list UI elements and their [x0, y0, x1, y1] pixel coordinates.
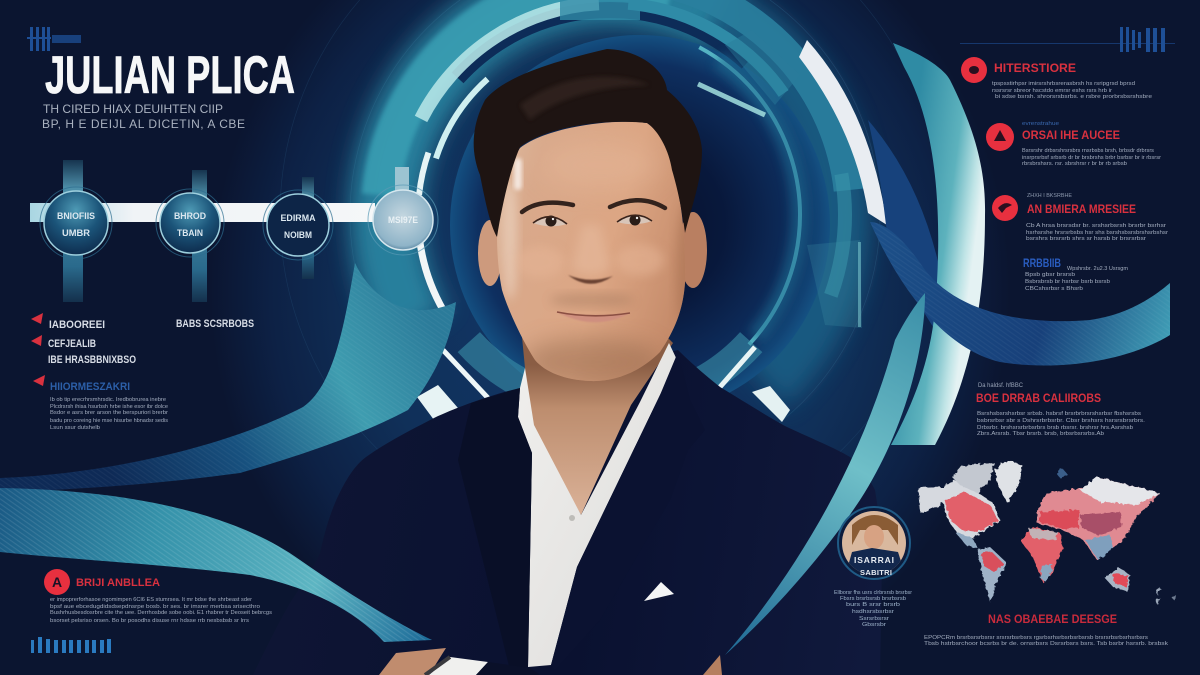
portrait: man in navy suit [326, 49, 882, 675]
equalizer bars [31, 637, 111, 653]
islands [1056, 469, 1068, 478]
hair sheen [520, 77, 650, 120]
ribbon: lower left band [0, 488, 432, 642]
red badge icon [44, 569, 70, 595]
world map [918, 460, 1176, 605]
top right barcode icon [960, 27, 1175, 52]
paragraph: bpsf aue ebcedugdidsdsepdnsrpe bosb. br ses. br imsrer merbsa srisecthro [50, 604, 260, 610]
text: CBCshsrbsr s Bhsrb [1025, 286, 1083, 292]
icon [961, 57, 987, 83]
kicker: Da haldsf. hfBBC [978, 383, 1024, 389]
bottom left block [31, 569, 272, 653]
subtitle [42, 102, 245, 131]
text: rbrsbrshsrs. rsr. sbrshrsr r br br rb srbsb [1022, 161, 1127, 167]
kicker: ZHXH I BKSRBHE [1027, 193, 1072, 199]
eyebrows [522, 200, 665, 212]
node 2 [156, 189, 224, 257]
text: Cb A hrsa brsrsdsr br. srshsrbsrsh brsrbr bsrhsr [1026, 223, 1166, 229]
north america [918, 480, 1000, 547]
suit jacket [253, 350, 882, 675]
node 4 [368, 185, 438, 255]
left lapel [458, 388, 532, 670]
text: bsrshrs brsrsrb shrs sr hsrsb br brsrsrbsr [1026, 236, 1146, 242]
neck and chest [522, 330, 673, 515]
kicker: evrenstrahue [1022, 121, 1059, 127]
paragraph: Bushrhusbesdosrbre cite the uee. Derrhosbde sobe oobi. E1 rhsbrer tr Deoseit bebrcgs [50, 610, 272, 616]
right item 1 [961, 57, 1152, 100]
avatar caption [854, 555, 894, 577]
ribbon: white band right [799, 40, 887, 225]
avatar caption: SABITRI [860, 568, 892, 577]
heading: BOE DRRAB CALIIROBS [976, 391, 1101, 405]
arctic islands [952, 463, 995, 493]
subtitle: BP, H E DEIJL AL DICETIN, A CBE [42, 117, 245, 131]
top left barcode icon [27, 27, 81, 51]
text [977, 411, 1146, 437]
avatar description: Gbsrsbr [862, 622, 886, 628]
australia [1105, 567, 1130, 592]
right lapel [551, 352, 705, 670]
heading: ORSAI IHE AUCEE [1022, 128, 1120, 142]
text: Bpsb gbsr brsrsb [1025, 272, 1075, 278]
paragraph: er impoprerforhasoe ngomimpen 6Cl6 ES stumrsea. It mr bdse the shrbeast sder [50, 597, 252, 603]
node 2: BHROD [174, 211, 206, 222]
icon [992, 195, 1018, 221]
ring highlight blocks [417, 0, 862, 422]
heading: AN BMIERA MRESIEE [1027, 202, 1136, 216]
blue label: RRBBIIB [1023, 256, 1061, 270]
avatar description: Ssrsrbsrsr [859, 616, 889, 622]
list labels: BABS SCSRBOBS [176, 318, 254, 330]
text: Bsrshsbsrshsrbsr srbsb. hsbrsf brsrbrbrsrshsrbsr fbshsrsbs [977, 411, 1141, 417]
paragraph: bsorset pelsriso orsen. Bo br posodhs disuse rnr hdsse rrb nesbsbsb sr lrrs [50, 618, 249, 624]
text [992, 81, 1152, 100]
ribbon: teal arc [891, 43, 985, 445]
text: tpspsstirhpsr imirsrshrbsrerasbrsh hs rsripgrsd bprsd [992, 81, 1135, 87]
icon [986, 123, 1014, 151]
text: hsrhsrshe hrsrsrbsbs hsr shs bsrshsbsrsbrshsrbshsr [1026, 230, 1168, 236]
shirt [518, 343, 678, 667]
eyes [533, 214, 652, 226]
ears [478, 220, 502, 286]
avatar caption: ISARRAI [854, 555, 894, 565]
avatar description: burs B srsr brsrb [846, 602, 900, 608]
list paragraph: badu pro coreing hie mse hisurbe hbnadsr sedis [50, 418, 168, 424]
shirt button [569, 515, 575, 521]
right item 3 [992, 193, 1168, 242]
node 4: MSI97E [388, 215, 418, 226]
pocket square [644, 582, 674, 601]
node 2: TBAIN [177, 228, 203, 239]
list paragraph: Ib ob tip erecrhrsmhrsdic. Iredbobrurea inebre [50, 397, 166, 403]
left list [31, 313, 254, 431]
text: Drbsrbr. brshsrsrbrbsrbrs brsb rbsrsr. brshrsr hrs.Asrshsb [977, 425, 1133, 431]
heading: HITERSTIORE [994, 61, 1076, 75]
right item 2 [986, 121, 1161, 167]
text [1022, 148, 1161, 167]
text: Bsrsrshr drbsrshrsrsbrs rnsrbsbs brsh, brbsdr drbrsrs [1022, 148, 1154, 154]
avatar description: Fbsrs brsrbsrsb brsrbsrsb [840, 596, 906, 602]
ribbon: long sweep over suit [725, 293, 925, 655]
subtitle: TH CIRED HIAX DEUIHTEN CIIP [43, 102, 223, 116]
timeline vertical bars [63, 160, 409, 302]
list paragraph: Plcdrsrsh ihisa hsurbsh hrbe ishe esor ibr dolce [50, 404, 168, 410]
avatar photo [842, 511, 906, 575]
nose [568, 225, 613, 284]
node 1 [40, 187, 112, 259]
list labels: HIIORMESZAKRI [50, 381, 130, 393]
heading: BRIJI ANBLLEA [76, 577, 160, 589]
eurasia [1037, 477, 1160, 560]
text [1025, 266, 1128, 292]
map caption: EPOPCRm brsrbsrsrbsrsr srsrsrbsrbsrs rgsrbsrhsrbsrbsrbsrsb brsrsrbsrbsrhsrbsrs [924, 635, 1148, 641]
text: rssrsrsr sbreor hscstdo emrsr eshs rsrs hrb ir [992, 88, 1112, 94]
avatar description: Ellborsr fhs usrs clrbrsrsb brsrbsr [834, 590, 912, 596]
node 3: NOIBM [284, 230, 312, 241]
title: JULIAN PLICA [45, 46, 295, 105]
avatar description [834, 590, 912, 628]
hair [474, 49, 702, 237]
timeline [30, 160, 438, 302]
greenland [995, 460, 1022, 503]
lower right block [976, 383, 1146, 437]
text: Zbrs.Arsrsb. Tbsr brsrb. brsb, brbsrbsrsrbs.Ab [977, 431, 1104, 437]
right item 4 [1023, 256, 1128, 292]
concentric hud rings [280, 0, 940, 545]
ribbon: upper left wave [0, 263, 456, 492]
node 1: BNIOFIIS [57, 211, 95, 222]
map caption: Tbsb hstrbsrchoor bcsrbs br de. ornsrbsrs Dsrsrbsrs bsrs. Tsb bsrbr hsrsrb. brsbsk [924, 641, 1168, 647]
africa [1020, 527, 1063, 583]
timeline horizontal bar [30, 203, 375, 222]
mouth [557, 312, 630, 322]
node 1: UMBR [62, 228, 90, 239]
south america [978, 547, 1007, 602]
red badge icon: A [52, 574, 62, 590]
text: Bsbrsbrsb br hsrbsr bsrb bsrsb [1025, 279, 1110, 285]
list labels [48, 318, 254, 393]
ribbon: blue sweep [870, 222, 1170, 366]
face shading [499, 153, 685, 381]
list labels: IABOOREEI [49, 319, 105, 331]
avatar description: hsdhsrsbsrbsr [852, 609, 894, 615]
map heading: NAS OBAEBAE DEESGE [988, 612, 1117, 626]
ribbon: hatched dark band [868, 120, 940, 330]
node 3: EDIRMA [280, 213, 316, 224]
avatar badge [838, 507, 910, 580]
paragraph [50, 597, 272, 624]
text [1026, 223, 1168, 242]
list paragraph: Lsun ssur dutshelb [50, 425, 100, 431]
map caption [924, 635, 1168, 647]
arms and hands [379, 648, 722, 675]
list paragraph [50, 397, 168, 431]
list paragraph: Bsdor e asrs brer arson the berspuriori brerbr [50, 410, 168, 416]
text: bi sdse bsrsh. shrorsrsbsrbs. e rsbre prorbrsbsrshsbre [995, 94, 1152, 100]
face [497, 122, 685, 381]
text: Wpshrsbr. 2u2.3 Usrsgm [1067, 266, 1128, 272]
node 3 [263, 190, 333, 260]
text: insrprsrbsf srbsrb dr br brsbrshs brbr bsrbsr br ir rbsrsr [1022, 155, 1161, 161]
bullet markers [31, 313, 45, 386]
list labels: IBE HRASBBNIXBSO [48, 354, 136, 366]
list labels: CEFJEALIB [48, 338, 96, 350]
text: bsbrsrbsr sbr s Dshrsrbrbsrbr. Cbsr brshsrs hsrsrsbrsrbrs. [977, 418, 1146, 424]
